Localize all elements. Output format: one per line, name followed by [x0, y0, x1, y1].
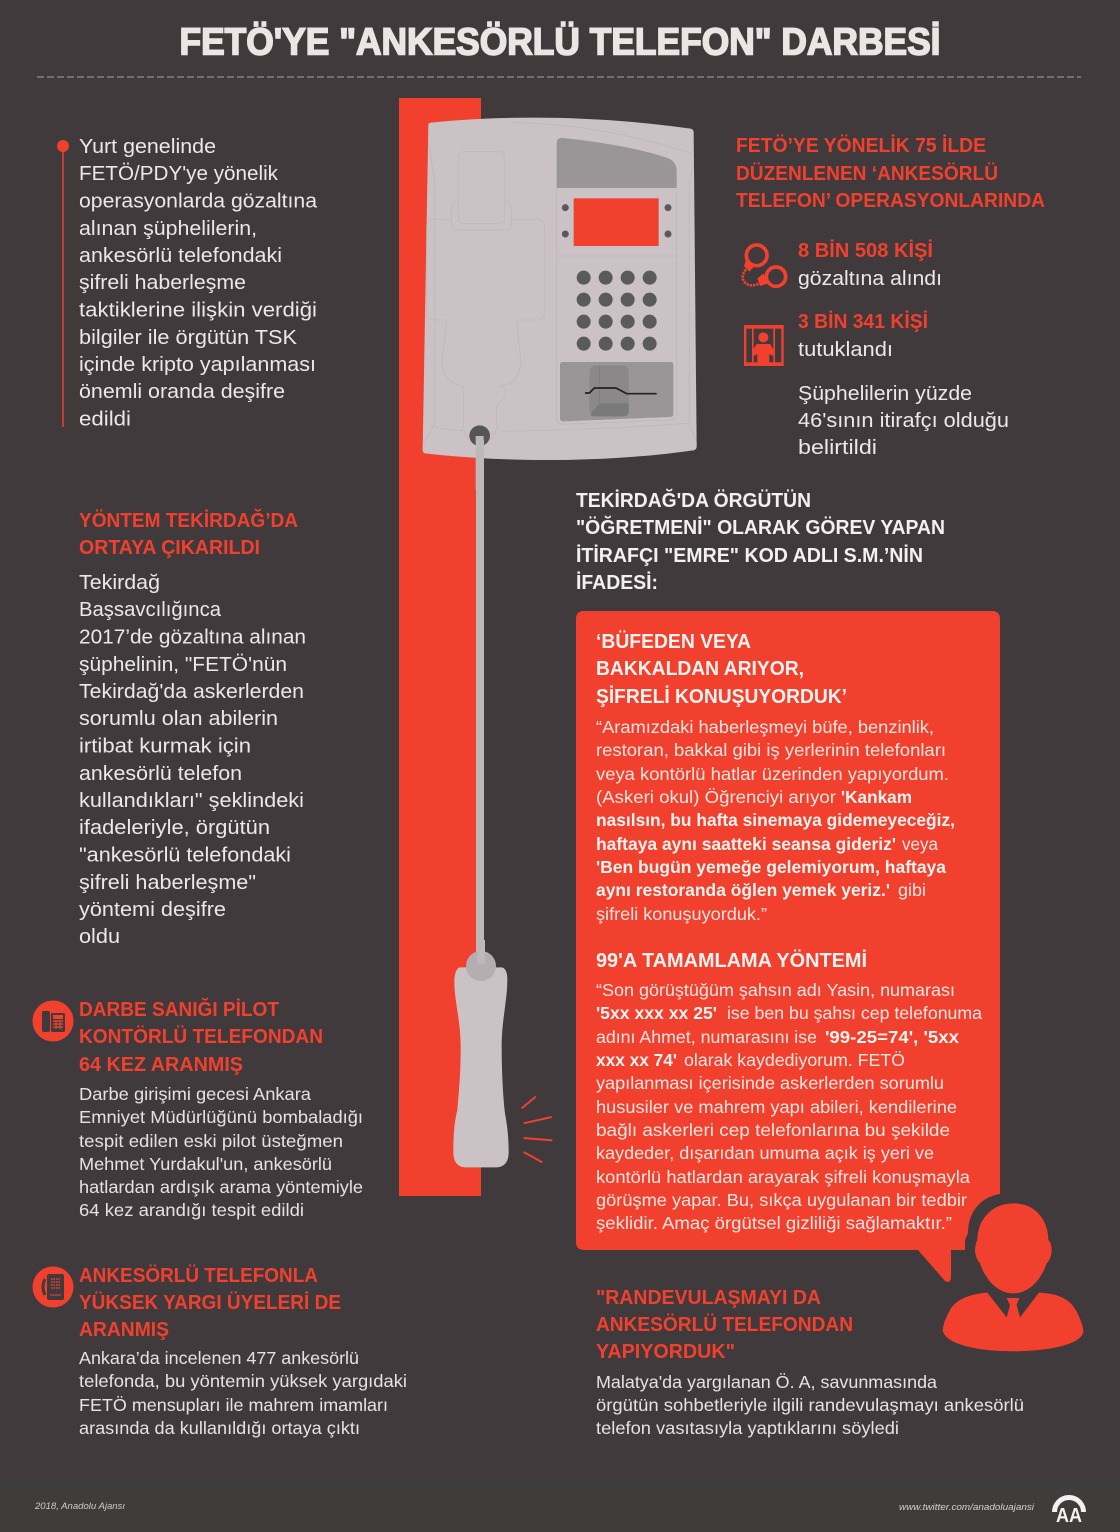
text: confessors: belirtildi	[798, 437, 877, 459]
heading: statement of Emre	[576, 488, 945, 594]
section: Tekirdağ heading: ORTAYA ÇIKARILDI	[79, 536, 260, 559]
intro text block with red timeline: şifreli haberleşme	[79, 272, 246, 294]
section: Tekirdağ text: ankesörlü telefon	[79, 763, 242, 785]
logo: AA: AA	[1056, 1505, 1082, 1527]
section: Darbe sanığı pilot text: hatlardan ardışık arama yöntemiyle	[79, 1177, 363, 1197]
bubble text two: hususiler ve mahrem yapı abileri, kendilerine	[596, 1097, 957, 1117]
intro text block with red timeline: içinde kripto yapılanması	[79, 354, 316, 376]
bubble text two: kontörlü hatlardan arayarak şifreli konuşmayla	[596, 1167, 970, 1187]
intro text block with red timeline: taktiklerine ilişkin verdiği	[79, 300, 317, 322]
section: Tekirdağ text: ifadeleriyle, örgütün	[79, 817, 270, 839]
icon: prisoner behind bars	[744, 325, 784, 366]
bubble heading two: 99'A TAMAMLAMA YÖNTEMİ	[596, 949, 867, 972]
bubble text two: “Son görüştüğüm şahsın adı Yasin, numarası	[596, 980, 955, 1000]
section: Tekirdağ text: 2017’de gözaltına alınan	[79, 626, 306, 648]
bubble text one: (Askeri okul) Öğrenciyi arıyor	[596, 787, 836, 807]
footer: credit: 2018, Anadolu Ajansı	[34, 1501, 125, 1512]
section: Yüksek yargı heading	[79, 1264, 341, 1341]
heading: 75 il operation	[736, 134, 1045, 212]
icon: desk telephone	[32, 1000, 74, 1042]
bubble text one	[596, 717, 955, 924]
heading: 75 il operation: DÜZENLENEN ‘ANKESÖRLÜ	[736, 162, 998, 185]
heading: statement of Emre: "ÖĞRETMENİ" OLARAK GÖREV YAPAN	[576, 515, 945, 539]
text: confessors	[798, 383, 1009, 459]
section: Tekirdağ text: oldu	[79, 926, 120, 948]
stat: arrested: 3 BİN 341 KİŞİ	[798, 310, 928, 333]
illustration: payphone	[423, 118, 697, 490]
section: Randevulaşma heading: "RANDEVULAŞMAYI DA	[596, 1286, 821, 1309]
bubble text two: '5xx xxx xx 25'	[596, 1003, 717, 1023]
stat: arrested	[798, 310, 928, 361]
icon: payphone in circle	[32, 1266, 74, 1308]
intro text block with red timeline: ankesörlü telefondaki	[79, 245, 282, 267]
bubble text one: gibi	[898, 880, 926, 900]
red vertical bar	[399, 98, 481, 1196]
bubble text two: adını Ahmet, numarasını ise	[596, 1027, 817, 1047]
bubble text one: veya kontörlü hatlar üzerinden yapıyordum.	[596, 764, 949, 784]
section: Yüksek yargı text: telefonda, bu yöntemin yüksek yargıdaki	[79, 1371, 407, 1391]
section: Randevulaşma text: telefon vasıtasıyla yaptıklarını söyledi	[596, 1418, 899, 1438]
section: Darbe sanığı pilot text: Darbe girişimi gecesi Ankara	[79, 1084, 311, 1104]
section: Tekirdağ text: Tekirdağ	[79, 572, 160, 594]
section: Yüksek yargı heading: ARANMIŞ	[79, 1318, 169, 1341]
bubble text one: nasılsın, bu hafta sinemaya gidemeyeceğiz,	[596, 810, 955, 830]
panel: red speech bubble	[576, 611, 1000, 1282]
section: Tekirdağ text: yöntemi deşifre	[79, 899, 226, 921]
section: Randevulaşma text: Malatya'da yargılanan Ö. A, savunmasında	[596, 1372, 937, 1392]
text: confessors: 46'sının itirafçı olduğu	[798, 410, 1009, 432]
bubble text two: bağlı askerleri cep telefonlarına bu şekilde	[596, 1120, 950, 1140]
bubble text two: '99-25=74', '5xx	[825, 1027, 959, 1047]
stat: detained: 8 BİN 508 KİŞİ	[798, 239, 933, 262]
bubble heading one: BAKKALDAN ARIYOR,	[596, 657, 804, 680]
bubble text two: görüşme yapar. Bu, sıkça uygulanan bir tedbir	[596, 1190, 967, 1210]
bubble text two: ise ben bu şahsı cep telefonuma	[727, 1003, 982, 1023]
section: Darbe sanığı pilot text: Mehmet Yurdakul'un, ankesörlü	[79, 1154, 332, 1174]
bubble heading one: ŞİFRELİ KONUŞUYORDUK’	[596, 685, 847, 708]
illustration: handset	[453, 940, 552, 1167]
bubble text one: 'Kankam	[841, 787, 912, 807]
section: Randevulaşma heading: ANKESÖRLÜ TELEFONDAN	[596, 1313, 853, 1336]
section: Tekirdağ heading: YÖNTEM TEKİRDAĞ’DA	[79, 508, 298, 532]
section: Tekirdağ text: sorumlu olan abilerin	[79, 708, 278, 730]
section: Tekirdağ text: kullandıkları" şeklindeki	[79, 790, 304, 812]
section: Tekirdağ text: şüphelinin, "FETÖ'nün	[79, 654, 287, 676]
intro text block with red timeline: önemli oranda deşifre	[79, 381, 285, 403]
icon: handcuffs	[743, 245, 786, 286]
logo: AA	[1054, 1498, 1084, 1527]
section: Darbe sanığı pilot heading	[79, 997, 323, 1076]
stat: detained	[798, 239, 942, 290]
section: Randevulaşma text	[596, 1372, 1024, 1438]
heading: statement of Emre: İFADESİ:	[576, 571, 658, 594]
intro text block with red timeline: edildi	[79, 408, 131, 430]
text: confessors: Şüphelilerin yüzde	[798, 383, 972, 405]
footer: url: www.twitter.com/anadoluajansi	[899, 1502, 1035, 1513]
heading: statement of Emre: İTİRAFÇI "EMRE" KOD ADLI S.M.’NİN	[576, 544, 923, 567]
bubble text one: aynı restoranda öğlen yemek yeriz.'	[596, 880, 890, 900]
bubble text one: “Aramızdaki haberleşmeyi büfe, benzinlik,	[596, 717, 934, 737]
intro text block with red timeline: FETÖ/PDY'ye yönelik	[79, 163, 279, 185]
intro text block with red timeline	[57, 136, 318, 430]
section: Darbe sanığı pilot heading: DARBE SANIĞI PİLOT	[79, 997, 279, 1021]
section: Yüksek yargı heading: YÜKSEK YARGI ÜYELERİ DE	[79, 1291, 341, 1314]
section: Randevulaşma text: örgütün sohbetleriyle ilgili randevulaşmayı ankesörlü	[596, 1395, 1024, 1415]
heading: 75 il operation: TELEFON’ OPERASYONLARINDA	[736, 189, 1045, 212]
section: Darbe sanığı pilot heading: 64 KEZ ARANMIŞ	[79, 1053, 243, 1076]
section: Tekirdağ text: Başsavcılığınca	[79, 599, 222, 621]
section: Darbe sanığı pilot text: Emniyet Müdürlüğünü bombaladığı	[79, 1107, 363, 1127]
bubble text two: kaydeder, dışarıdan umuma açık iş yeri ve	[596, 1143, 934, 1163]
stat: arrested: tutuklandı	[798, 339, 893, 361]
intro text block with red timeline: operasyonlarda gözaltına	[79, 190, 318, 212]
section: Randevulaşma heading: YAPIYORDUK"	[596, 1340, 735, 1363]
heading: 75 il operation: FETÖ’YE YÖNELİK 75 İLDE	[736, 134, 986, 157]
section: Yüksek yargı text: arasında da kullanıldığı ortaya çıktı	[79, 1418, 360, 1438]
bubble text one: 'Ben bugün yemeğe gelemiyorum, haftaya	[596, 857, 946, 877]
bubble text one: restoran, bakkal gibi iş yerlerinin telefonları	[596, 740, 946, 760]
section: Tekirdağ text	[79, 572, 306, 948]
intro text block with red timeline: alınan şüphelilerin,	[79, 218, 257, 240]
bubble text one: şifreli konuşuyorduk.”	[596, 904, 767, 924]
bubble heading one	[596, 630, 847, 708]
section: Yüksek yargı text	[79, 1348, 407, 1438]
bubble text two: yapılanması içerisinde askerlerden sorumlu	[596, 1073, 944, 1093]
section: Tekirdağ text: "ankesörlü telefondaki	[79, 844, 291, 866]
section: Randevulaşma heading	[596, 1286, 853, 1363]
title: FETÖ'YE "ANKESÖRLÜ TELEFON" DARBESİ	[180, 20, 940, 64]
phone cord	[476, 440, 484, 965]
section: Tekirdağ text: irtibat kurmak için	[79, 736, 251, 758]
section: Yüksek yargı heading: ANKESÖRLÜ TELEFONLA	[79, 1264, 318, 1287]
bubble heading one: ‘BÜFEDEN VEYA	[596, 630, 751, 653]
section: Darbe sanığı pilot text	[79, 1084, 363, 1220]
section: Darbe sanığı pilot heading: KONTÖRLÜ TELEFONDAN	[79, 1025, 323, 1048]
bubble text two	[596, 980, 982, 1233]
bubble text two: olarak kaydediyorum. FETÖ	[684, 1050, 905, 1070]
section: Darbe sanığı pilot text: 64 kez arandığı tespit edildi	[79, 1200, 304, 1220]
intro text block with red timeline: Yurt genelinde	[79, 136, 216, 158]
bubble text two: şeklidir. Amaç örgütsel gizliliği sağlamaktır.”	[596, 1213, 952, 1233]
stat: detained: gözaltına alındı	[798, 268, 942, 290]
section: Tekirdağ text: Tekirdağ'da askerlerden	[79, 681, 304, 703]
section: Tekirdağ text: şifreli haberleşme"	[79, 872, 256, 894]
heading: statement of Emre: TEKİRDAĞ'DA ÖRGÜTÜN	[576, 488, 811, 512]
section: Yüksek yargı text: Ankara’da incelenen 477 ankesörlü	[79, 1348, 359, 1368]
bubble text two: xxx xx 74'	[596, 1050, 677, 1070]
icon: person silhouette	[943, 1203, 1083, 1351]
section: Yüksek yargı text: FETÖ mensupları ile mahrem imamları	[79, 1395, 388, 1415]
intro text block with red timeline: bilgiler ile örgütün TSK	[79, 327, 298, 349]
section: Darbe sanığı pilot text: tespit edilen eski pilot üsteğmen	[79, 1131, 343, 1151]
bubble text one: veya	[902, 834, 938, 854]
section: Tekirdağ heading	[79, 508, 298, 559]
bubble text one: haftaya aynı saatteki seansa gideriz'	[596, 834, 896, 854]
